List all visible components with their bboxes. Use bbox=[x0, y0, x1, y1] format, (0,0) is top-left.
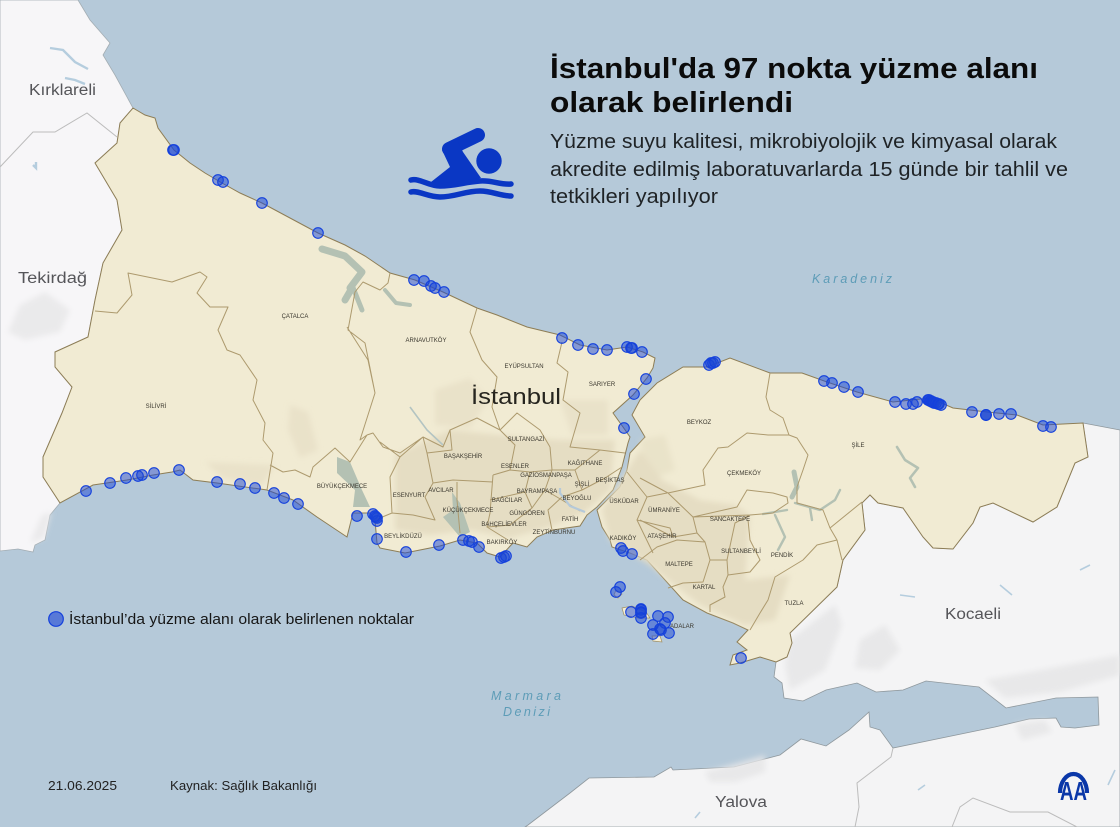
district labels: TUZLA bbox=[784, 601, 804, 607]
place names: Karadeniz bbox=[812, 272, 894, 286]
district labels: GAZİOSMANPAŞA bbox=[520, 472, 572, 479]
title: İstanbul'da 97 nokta yüzme alanı bbox=[550, 53, 1038, 85]
Golden Horn bbox=[560, 488, 585, 512]
district labels: BEŞİKTAŞ bbox=[596, 477, 624, 484]
title bbox=[550, 53, 1038, 119]
district labels: ÜMRANİYE bbox=[648, 507, 680, 514]
district labels: MALTEPE bbox=[665, 562, 693, 568]
subtitle: tetkikleri yapılıyor bbox=[550, 186, 718, 208]
district labels bbox=[146, 314, 865, 630]
islands bbox=[614, 590, 662, 642]
district labels: KARTAL bbox=[693, 585, 716, 591]
district labels: BAYRAMPAŞA bbox=[517, 489, 557, 495]
land: Istanbul Asia side bbox=[597, 358, 1088, 665]
district labels: KADIKÖY bbox=[610, 535, 636, 542]
district labels: EYÜPSULTAN bbox=[504, 363, 544, 370]
district labels: ÜSKÜDAR bbox=[609, 498, 639, 505]
logo: AA bbox=[1060, 774, 1087, 806]
district labels: BEYOĞLU bbox=[562, 495, 592, 502]
district labels: KÜÇÜKÇEKMECE bbox=[443, 507, 493, 514]
district labels: BAKIRKÖY bbox=[487, 539, 517, 546]
district labels: FATİH bbox=[562, 516, 578, 523]
district labels: ŞİLE bbox=[851, 442, 865, 449]
subtitle: akredite edilmiş laboratuvarlarda 15 günde bir tahlil ve bbox=[550, 159, 1068, 181]
district labels: BAŞAKŞEHİR bbox=[444, 453, 483, 460]
district boundaries: Asia bbox=[627, 373, 862, 630]
district labels: SULTANGAZİ bbox=[508, 436, 545, 443]
place names: Yalova bbox=[715, 794, 767, 811]
district labels: ÇEKMEKÖY bbox=[727, 470, 761, 477]
district labels: BAHÇELİEVLER bbox=[481, 521, 527, 528]
place names: Tekirdağ bbox=[18, 270, 87, 287]
subtitle: Yüzme suyu kalitesi, mikrobiyolojik ve kimyasal olarak bbox=[550, 131, 1058, 153]
district labels: SARIYER bbox=[589, 382, 616, 388]
logo: AA: AA bbox=[1060, 776, 1087, 806]
district labels: SULTANBEYLİ bbox=[721, 548, 761, 555]
district labels: ATAŞEHİR bbox=[647, 533, 677, 540]
place names: Marmara bbox=[491, 689, 563, 703]
urban texture: Asia bbox=[602, 435, 790, 625]
lakes: Asia bbox=[763, 447, 918, 550]
place names: Kırklareli bbox=[29, 82, 96, 99]
district labels: SİLİVRİ bbox=[146, 403, 167, 410]
district labels: SANCAKTEPE bbox=[710, 517, 750, 523]
district labels: ŞİŞLİ bbox=[575, 481, 590, 488]
place names bbox=[18, 82, 1001, 811]
district labels: BAĞCILAR bbox=[492, 497, 523, 504]
lakes: Europe bbox=[322, 249, 470, 537]
district labels: ESENYURT bbox=[393, 493, 426, 499]
source: Kaynak: Sağlık Bakanlığı bbox=[170, 779, 317, 793]
title: olarak belirlendi bbox=[550, 87, 793, 119]
district labels: KAĞITHANE bbox=[568, 460, 602, 467]
district labels: ESENLER bbox=[501, 464, 530, 470]
subtitle bbox=[550, 131, 1068, 208]
place names: İstanbul bbox=[471, 384, 561, 409]
land: Istanbul Europe side bbox=[43, 108, 655, 557]
date: 21.06.2025 bbox=[48, 779, 117, 793]
district labels: ZEYTİNBURNU bbox=[533, 529, 575, 536]
district labels: ÇATALCA bbox=[282, 314, 308, 320]
district labels: ADALAR bbox=[670, 624, 695, 630]
district boundaries: Europe bbox=[95, 272, 625, 540]
swimming area markers bbox=[81, 145, 1056, 663]
urban texture: Europe bbox=[205, 378, 615, 538]
district labels: GÜNGÖREN bbox=[509, 510, 545, 517]
land: Thrace neighbours bbox=[0, 0, 133, 552]
legend: İstanbul’da yüzme alanı olarak belirlenen noktalar bbox=[69, 610, 414, 628]
land: Kocaeli and Yalova bbox=[525, 423, 1120, 827]
district labels: BÜYÜKÇEKMECE bbox=[317, 483, 367, 490]
place names: Kocaeli bbox=[945, 606, 1001, 623]
district labels: ARNAVUTKÖY bbox=[406, 337, 446, 344]
district labels: PENDİK bbox=[771, 552, 793, 559]
place names: Denizi bbox=[503, 705, 552, 719]
district labels: BEYKOZ bbox=[687, 420, 712, 426]
district labels: AVCILAR bbox=[428, 488, 454, 494]
icon: swimmer bbox=[411, 135, 511, 197]
district labels: BEYLİKDÜZÜ bbox=[384, 533, 422, 540]
